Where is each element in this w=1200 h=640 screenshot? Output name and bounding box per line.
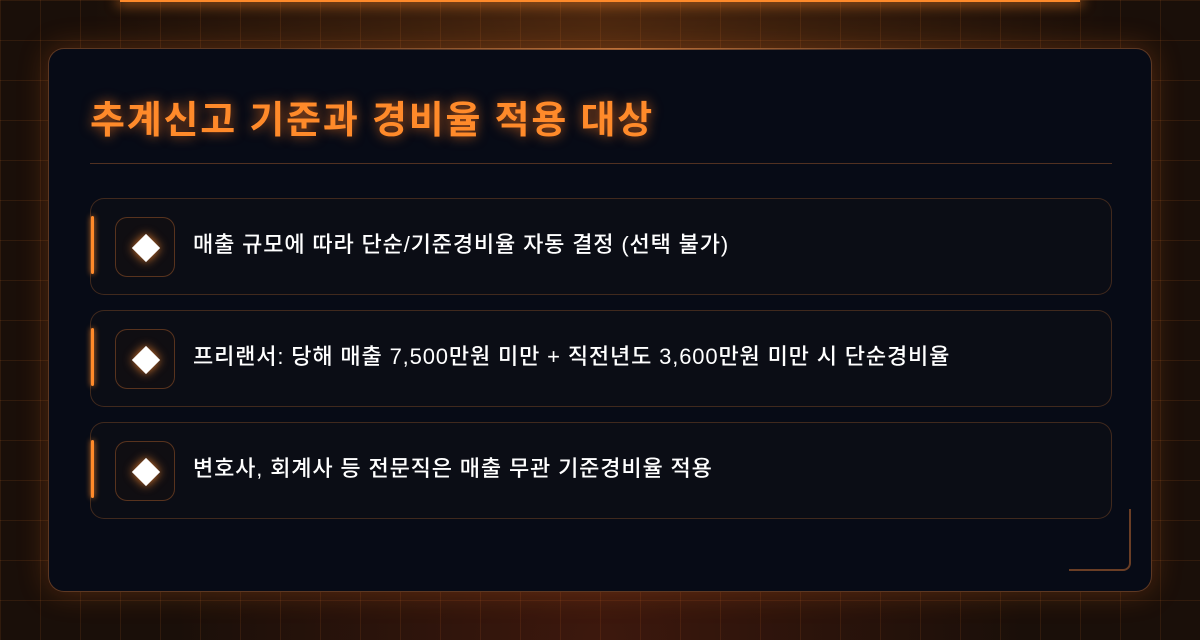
text 3: 변호사, 회계사 등 전문직은 매출 무관 기준경비율 적용 [193,456,713,481]
icon: diamond [115,441,175,501]
panel: main card [48,48,1152,592]
text 2: 프리랜서: 당해 매출 7,500만원 미만 + 직전년도 3,600만원 미만 시 단순경비율 [193,344,950,369]
icon: diamond [115,217,175,277]
item 2 [90,310,1112,407]
title: 추계신고 기준과 경비율 적용 대상 [90,100,654,142]
icon: diamond [115,329,175,389]
text 1: 매출 규모에 따라 단순/기준경비율 자동 결정 (선택 불가) [193,232,729,257]
item 3 [90,422,1112,519]
item 1 [90,198,1112,295]
